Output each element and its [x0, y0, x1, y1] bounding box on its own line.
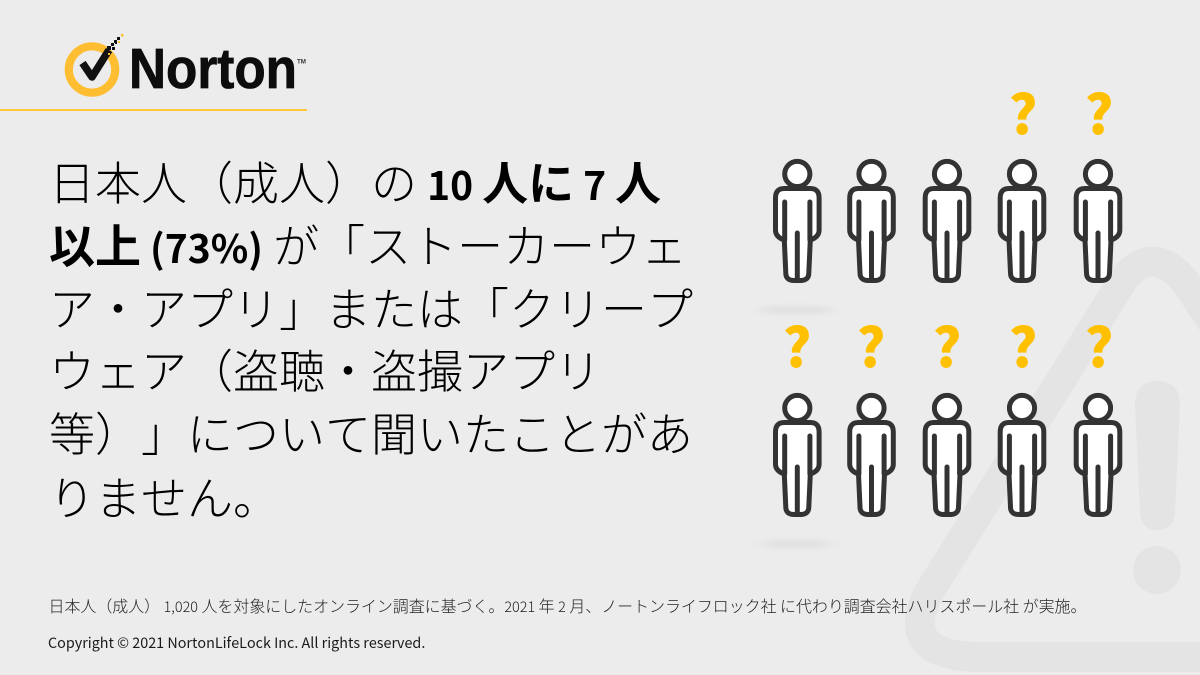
question marks: ? [1085, 304, 1113, 383]
icon: checkmark ring [69, 34, 124, 93]
headline text: ウェア（盗聴・盗撮アプリ [49, 336, 601, 402]
headline text: りません。 [49, 463, 279, 529]
question marks [783, 71, 1113, 383]
row 2 people [776, 395, 1120, 514]
logo: Norton [64, 34, 306, 100]
question marks: ? [783, 304, 811, 383]
copyright: Copyright © 2021 NortonLifeLock Inc. All rights reserved. [48, 632, 425, 653]
headline text: ア・アプリ」または「クリープ [49, 274, 693, 340]
divider line [0, 109, 307, 111]
headline text [49, 148, 693, 529]
question marks: ? [1085, 71, 1113, 150]
question marks: ? [1009, 71, 1037, 150]
shadow: row 1 [758, 307, 834, 313]
shadow: row 2 [758, 541, 834, 547]
headline text: 等）」について聞いたことがあ [49, 399, 693, 465]
question marks: ? [1009, 304, 1037, 383]
question marks: ? [857, 304, 885, 383]
headline text: 日本人（成人）の 10 人に 7 人 [49, 148, 661, 214]
headline text: 以上 (73%) が「ストーカーウェ [49, 211, 687, 277]
trademark: TM [297, 58, 306, 66]
question marks: ? [933, 304, 961, 383]
row 1 people [776, 161, 1120, 280]
footnote: survey source: 日本人（成人） 1,020 人を対象にしたオンライン調査に基づく。2021 年 2 月、ノートンライフロック社 に代わり調査会社ハリスポール社 が実施。 [48, 593, 1086, 617]
